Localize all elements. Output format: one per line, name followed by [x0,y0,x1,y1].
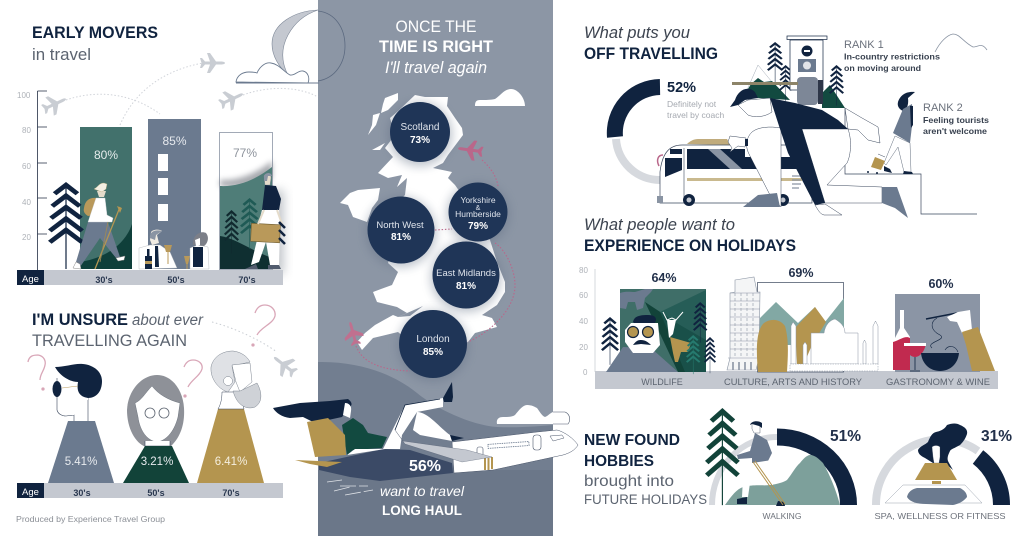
bar chart: early movers [17,91,285,285]
hair [273,399,352,422]
band: categories: WILDLIFE [641,377,683,387]
heading: unsure: I'M UNSURE [32,311,128,329]
gold skirt [307,418,346,457]
legs [383,398,443,449]
map: UK [340,93,509,381]
chart axis: 80 [579,266,588,275]
axis band: age [17,270,283,285]
stat: rank 1: RANK 1 [844,39,884,51]
shirt [770,98,848,205]
region: Yorkshire and Humberside: Humberside [455,209,501,219]
figure: man with binoculars [606,315,678,372]
stat: rank 1 [844,39,940,73]
knee stripes [792,176,801,188]
figure: bearded man in 70s: 6.41% [215,456,247,468]
panel: early movers [17,10,319,285]
flight paths [66,63,318,125]
left leg and arm [747,127,781,207]
axis band: age [17,483,283,498]
band: categories: GASTRONOMY & WINE [886,377,990,387]
region: Scotland: 73% [410,135,430,146]
stat: 52 percent: 52% [667,80,696,96]
region: Yorkshire and Humberside: & [476,205,481,212]
figure: man in 30s: 5.41% [65,456,97,468]
donut chart: 52 percent [615,87,660,180]
region: London: London [416,334,450,345]
stat: rank 1: In-country restrictions [844,52,940,62]
heading: hobbies: FUTURE HOLIDAYS [584,492,707,507]
illustration: steps [845,108,977,214]
caption: long haul [380,483,465,518]
title: early movers: in travel [32,45,91,64]
hair [730,89,758,107]
plane rear fuselage [319,449,453,481]
gauge: walking [705,408,861,521]
chart axis [17,91,47,270]
stat: rank 2 [923,102,989,136]
illustration: giant crouching person [728,89,908,218]
region: East Midlands: East Midlands [436,268,496,279]
icon: chopsticks and hand [926,313,957,319]
icon: pine tree [48,182,84,269]
icon: plane left [39,90,70,119]
heading: hobbies: NEW FOUND [584,432,680,449]
bar: 70s [220,132,284,274]
icon: pine trees [601,302,716,374]
stat: rank 2: aren't welcome [923,126,987,136]
chart axis: 40 [22,198,31,207]
plane details [477,435,564,470]
region: London [399,310,467,378]
heading: unsure: about ever [132,312,204,329]
bar: 50s: 85% [162,134,187,148]
illustration: coach [657,139,812,206]
white strip [347,447,398,455]
bar: gastronomy [893,277,995,372]
icon: moon edge [318,11,345,81]
heading: unsure: TRAVELLING AGAIN [32,332,187,350]
icon: cloud white [475,89,525,106]
heading: off travelling [584,23,718,63]
heading: once the time is right: TIME IS RIGHT [379,37,494,56]
icon: plane [268,349,301,382]
heading: unsure [32,311,204,350]
panel: unsure about travelling [16,305,301,524]
stat: 52 percent [667,80,724,120]
icon: rock statue [757,320,788,372]
front arm [845,108,880,143]
right thigh [802,129,882,203]
icon: pink plane top [457,138,484,162]
stat: 52 percent: travel by coach [667,110,724,120]
icon: cloud outline [935,34,987,52]
caption: long haul: want to travel [380,483,465,499]
icon: cloud over plane [497,405,570,424]
icon: hiker [73,183,125,269]
heading: once the time is right [379,17,494,77]
wing [395,430,492,462]
tail fin [295,460,342,467]
panel: new found hobbies [584,408,1012,521]
icon: pink question marks [28,305,275,397]
band: categories [595,371,998,389]
chart axis: 40 [579,317,588,326]
plane front fuselage [452,430,578,473]
icon: gold pyramid [795,307,826,366]
axis band: age: Age [22,274,39,285]
icon: pine tree [705,408,740,505]
icon: moon and cloud [236,10,319,83]
icon: plane right [216,85,247,114]
icon: traveller with suitcase [245,173,285,269]
figure: meditating woman [885,424,982,505]
gauge: walking: WALKING [763,511,801,521]
gauge: spa [874,424,1012,521]
illustration: mountains and border gate [732,36,845,108]
region: Yorkshire and Humberside: 79% [468,221,488,232]
heading: hobbies [584,432,707,507]
speed lines [327,480,373,495]
chart axis: 20 [579,343,588,352]
heading: once the time is right: I'll travel again [385,58,487,77]
heading: experience: What people want to [584,215,735,234]
chart axis: 60 [579,291,588,300]
icon: leaning tower of Pisa [727,277,760,370]
axis band: age: 50's [167,275,185,285]
region: Yorkshire and Humberside [448,182,508,242]
region: East Midlands: 81% [456,281,476,292]
foot [815,204,842,215]
stat: rank 2: RANK 2 [923,102,963,114]
region: East Midlands [432,242,500,308]
bar: 50s [148,119,201,269]
percent: 56% [409,458,441,475]
axis band: age: 30's [95,275,113,285]
chart axis: 20 [22,233,31,242]
region: North West: North West [376,220,424,231]
heading: once the time is right: ONCE THE [396,17,476,36]
figure: woman with suitcase [867,92,915,174]
bar: gastronomy: 60% [928,277,954,291]
region: Scotland: Scotland [401,122,439,133]
region: North West: 81% [391,232,411,243]
axis band: age: 70's [238,275,256,285]
bar: culture [727,266,878,372]
green top [342,418,387,455]
chart axis: 60 [22,162,31,171]
region: Scotland [390,102,450,162]
bar: 30s [80,127,132,269]
face [738,98,772,117]
axis band: age: Age [22,487,39,498]
panel: centre background [318,0,553,536]
heading: experience [584,215,796,255]
figure: bearded man in 70s [197,351,264,483]
heading: off travelling: OFF TRAVELLING [584,44,718,63]
gauge: spa: 31% [981,428,1012,445]
heading: hobbies: brought into [584,473,674,490]
caption: long haul: LONG HAUL [382,502,462,518]
figure: woman in 50s: 3.21% [141,456,173,468]
panel: what puts you off [584,23,989,218]
shoes [743,193,780,207]
bar: wildlife [601,271,716,374]
figure: walker [737,421,785,506]
gauge: walking: 51% [830,428,861,445]
panel: once the time is right [273,11,578,536]
icon: deer [663,312,691,362]
bar: culture: 69% [788,266,814,280]
icon: couple with wine [139,230,209,269]
region: Yorkshire and Humberside: Yorkshire [460,195,496,205]
icon: Taj Mahal [790,319,878,371]
icon: plane top [200,53,225,73]
axis band: age: 30's [73,488,91,498]
chart axis [579,266,595,377]
icon: noodle bowl [921,353,959,371]
stat: rank 1: on moving around [844,63,921,73]
gauge: spa: SPA, WELLNESS OR FITNESS [874,511,1006,521]
figure: woman in 50s [123,375,189,483]
chart axis: 0 [583,368,588,377]
stat: 52 percent: Definitely not [667,99,717,109]
region: North West [368,196,434,264]
axis band: age: 70's [222,488,240,498]
icon: wine glass [904,343,926,357]
bar: wildlife: 64% [651,271,677,285]
title: early movers [32,23,158,64]
bar: 30s: 80% [94,148,118,162]
flight paths pink dotted [356,160,515,371]
bar: 70s: 77% [233,146,257,160]
region: London: 85% [423,347,443,358]
band: categories: CULTURE, ARTS AND HISTORY [724,377,862,387]
illustration: woman lying on plane [273,382,578,481]
hand [728,136,746,152]
figure: man in 30s [48,364,114,483]
title: early movers: EARLY MOVERS [32,23,158,42]
heading: hobbies: HOBBIES [584,453,654,470]
chart axis: 100 [17,91,31,100]
landscape layers [318,362,553,536]
chart axis: 80 [22,126,31,135]
flight path dotted [212,322,277,352]
heading: off travelling: What puts you [584,23,691,42]
icon: pink plane bottom [341,320,365,347]
icon: wine bottle [893,310,910,370]
stat: rank 2: Feeling tourists [923,115,989,125]
icon: bear [620,289,653,310]
heading: experience: EXPERIENCE ON HOLIDAYS [584,236,796,255]
panel: experience on holidays [579,215,998,389]
credit line: Produced by Experience Travel Group [16,514,165,524]
axis band: age: 50's [147,488,165,498]
